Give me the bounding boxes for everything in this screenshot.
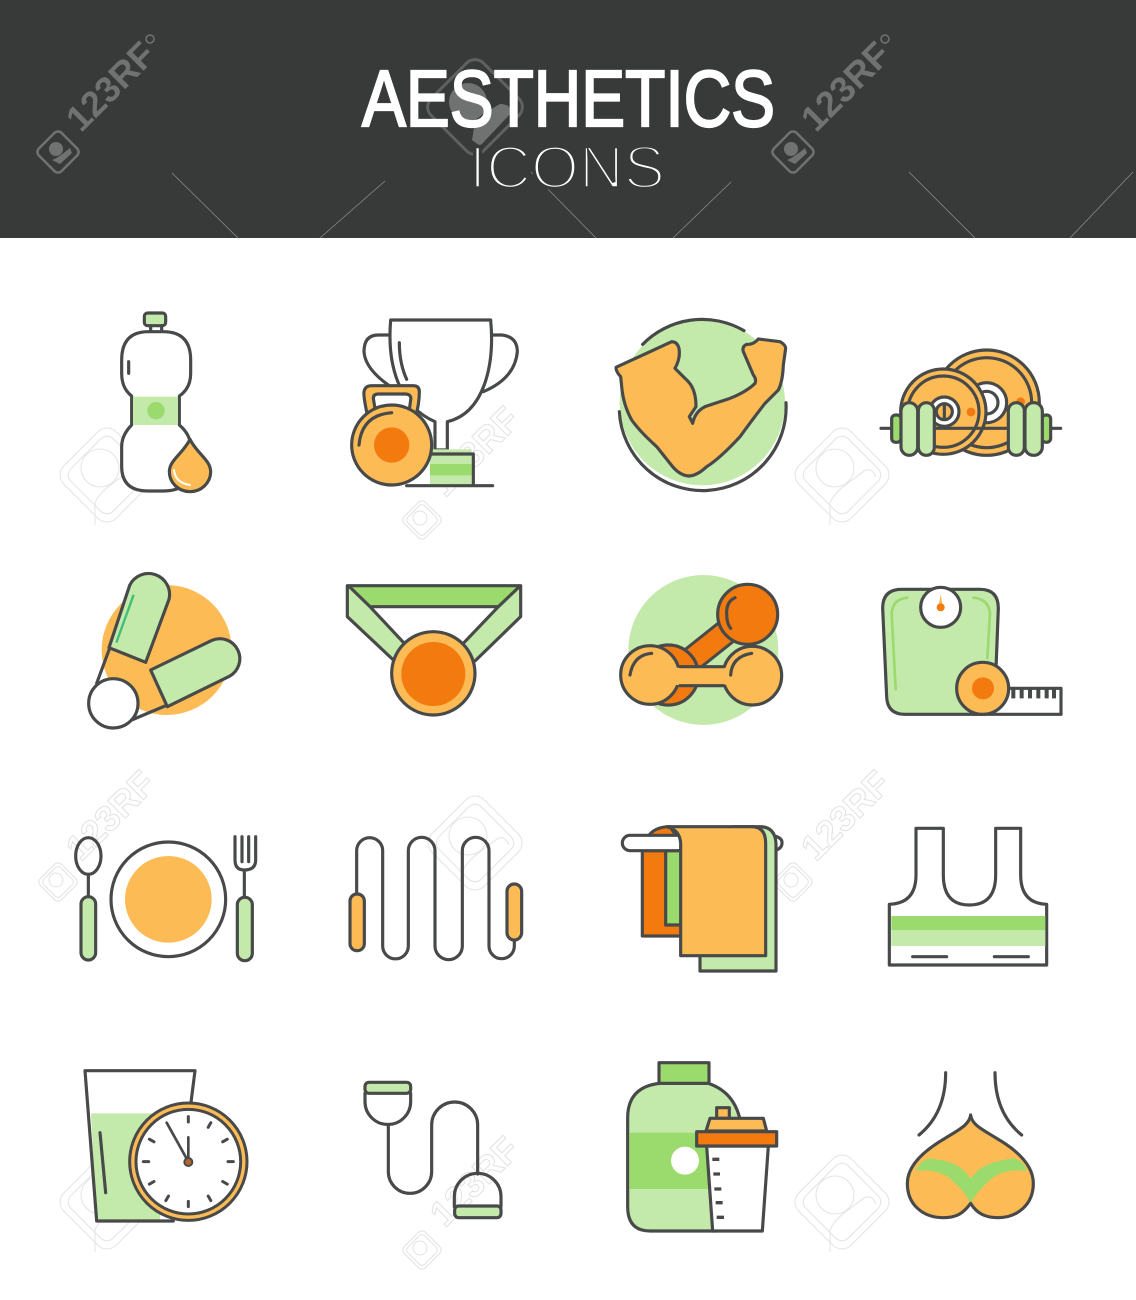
icon: plate with spoon and fork bbox=[76, 837, 256, 961]
icon: capsules on orange circle bbox=[89, 573, 240, 728]
header banner bbox=[0, 0, 1136, 238]
body watermarks: 123RF bbox=[422, 399, 527, 504]
icon: jump rope bbox=[350, 837, 522, 960]
watermark: left logo: 123RF bbox=[58, 34, 163, 139]
icon: weight plates and dumbbell bbox=[881, 350, 1061, 455]
icon: protein jar and shaker bbox=[628, 1063, 777, 1231]
watermark: right logo: 123RF bbox=[793, 34, 898, 139]
icon: water bottle with drop bbox=[122, 313, 211, 492]
icon: flexed arm in circle bbox=[616, 319, 786, 491]
body watermarks: 123RF bbox=[58, 763, 163, 868]
icon: crossed dumbbells bbox=[621, 575, 782, 725]
subtitle: ICONS: ICONS bbox=[469, 134, 665, 201]
watermark: left logo bbox=[35, 34, 163, 175]
body watermarks: 123RF bbox=[793, 763, 898, 868]
icon: glass of water with clock bbox=[85, 1071, 247, 1221]
watermark: center logo bbox=[423, 55, 527, 159]
title: AESTHETICS: AESTHETICS bbox=[362, 54, 775, 143]
body watermarks: 123RF bbox=[422, 1129, 527, 1234]
icon: bathroom scale with tape measure bbox=[883, 587, 1061, 714]
icon: cleavage and neckline bbox=[907, 1073, 1033, 1218]
icon: towels on rail bbox=[622, 827, 782, 971]
icon: trophy with kettlebell bbox=[352, 320, 517, 486]
watermark: right logo bbox=[770, 34, 898, 175]
body watermarks bbox=[37, 399, 898, 1271]
icon: resistance band bbox=[365, 1082, 501, 1218]
icon: medal with ribbon bbox=[347, 586, 521, 715]
icon: sports top bbox=[889, 828, 1047, 965]
